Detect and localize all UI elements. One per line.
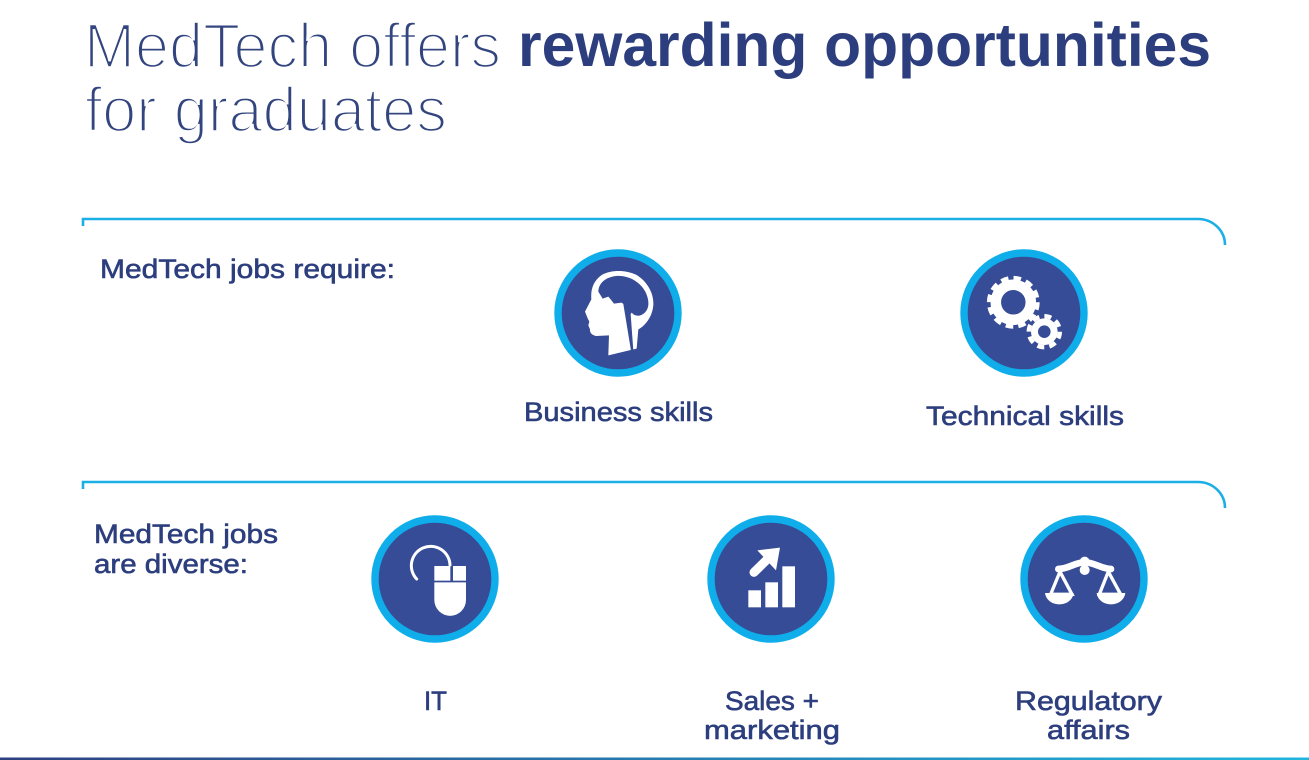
label: sales + marketing: Sales + bbox=[725, 686, 819, 716]
section bracket line bbox=[83, 219, 1225, 245]
title: MedTech offers bbox=[84, 12, 501, 82]
footer gradient bar bbox=[0, 758, 1309, 760]
section heading: jobs require: MedTech jobs require: bbox=[100, 254, 395, 284]
label: regulatory affairs: Regulatory bbox=[1015, 686, 1163, 716]
section heading: jobs are diverse: are diverse: bbox=[94, 549, 248, 579]
section heading: jobs are diverse bbox=[94, 519, 278, 579]
label: IT: IT bbox=[424, 686, 447, 716]
panel: MedTech jobs are diverse bbox=[83, 482, 1225, 745]
label: sales + marketing: marketing bbox=[704, 715, 840, 745]
icon: business skills head with brain bbox=[558, 253, 678, 373]
icon: IT computer mouse bbox=[375, 519, 495, 639]
panel: MedTech jobs require bbox=[83, 219, 1225, 431]
label: regulatory affairs: affairs bbox=[1047, 715, 1130, 745]
section heading: jobs are diverse: MedTech jobs bbox=[94, 519, 278, 549]
title bbox=[84, 11, 1211, 146]
label: sales + marketing bbox=[704, 686, 840, 745]
label: business skills: Business skills bbox=[524, 397, 713, 427]
section bracket line bbox=[83, 482, 1225, 508]
label: technical skills: Technical skills bbox=[926, 401, 1124, 431]
title: rewarding opportunities bbox=[518, 11, 1211, 79]
label: regulatory affairs bbox=[1015, 686, 1163, 745]
icon: technical skills gears bbox=[964, 253, 1084, 373]
title: for graduates bbox=[85, 76, 447, 146]
icon: regulatory scales bbox=[1024, 519, 1144, 639]
icon: sales and marketing chart bbox=[711, 519, 831, 639]
